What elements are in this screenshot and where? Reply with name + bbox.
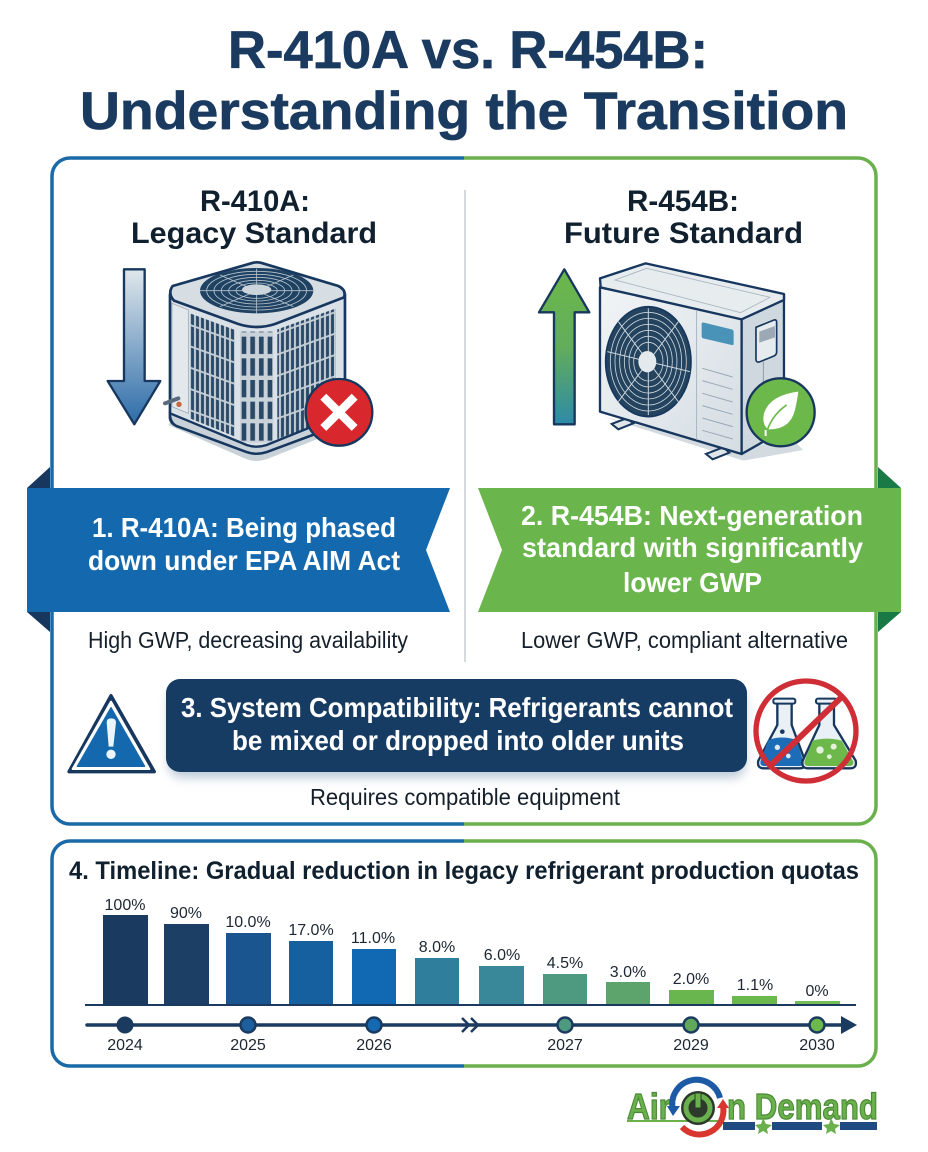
ribbon: R-454B: 2. R-454B: Next-generation [521,500,863,531]
bar chart: production quotas [85,897,856,1006]
heading: R-410A: Legacy Standard [131,217,377,250]
bar chart: production quotas: 6.0% [484,947,520,964]
timeline axis: 2029 [673,1037,709,1054]
logo: Air On Demand [627,1080,878,1134]
bar chart: production quotas: 1.1% [737,977,773,994]
heading: R-454B: Future Standard [564,217,803,250]
ribbon: R-410A: down under EPA AIM Act [88,545,400,576]
icon: no-mixing flasks [756,681,856,781]
bar chart: production quotas: 0% [805,983,829,1000]
heading: R-410A [131,185,377,250]
heading: timeline: 4. Timeline: Gradual reduction in legacy refrigerant production quotas [69,857,859,885]
bar chart: production quotas: 100% [105,897,145,914]
logo: Air On Demand: n Demand [727,1086,878,1127]
bar chart: production quotas: 17.0% [288,922,334,939]
icon: modern outdoor unit with leaf [600,263,815,461]
timeline axis: 2025 [230,1037,266,1054]
bar chart: production quotas: 10.0% [225,914,271,931]
timeline axis [87,1016,857,1054]
icon: legacy condenser unit with red X [165,262,372,461]
bar chart: production quotas: 8.0% [419,939,455,956]
panel: timeline [52,841,876,1066]
text: equipment note: Requires compatible equipment [310,784,621,810]
ribbon: R-454B: lower GWP [623,567,762,598]
title: R-410A vs. R-454B: [228,21,708,80]
ribbon: R-454B: standard with significantly [522,532,863,563]
text: R-454B note: Lower GWP, compliant alternative [521,627,848,653]
logo: Air On Demand: Air [627,1086,671,1127]
bar chart: production quotas: 11.0% [351,930,395,947]
timeline axis: 2027 [547,1037,583,1054]
icon: warning triangle [69,696,154,772]
panel: comparison [27,158,901,824]
icon: up arrow [539,269,589,424]
ribbon: R-410A [27,467,450,632]
bar chart: production quotas: 4.5% [547,955,583,972]
bar chart: production quotas: 90% [170,905,202,922]
callout: system compatibility [166,679,747,778]
icon: down arrow [108,269,160,424]
bar chart: production quotas: 3.0% [610,964,646,981]
heading: R-454B: R-454B: [627,185,739,218]
ribbon: R-410A: 1. R-410A: Being phased [92,512,396,543]
text: R-410A note: High GWP, decreasing availability [88,627,408,653]
heading: R-454B [564,185,803,250]
title: Understanding the Transition [80,82,848,141]
callout: system compatibility: be mixed or dropped into older units [232,725,684,756]
callout: system compatibility: 3. System Compatibility: Refrigerants cannot [181,692,733,723]
timeline axis: 2024 [107,1037,143,1054]
timeline axis: 2026 [356,1037,392,1054]
heading: R-410A: R-410A: [200,185,310,218]
timeline axis: 2030 [799,1037,835,1054]
bar chart: production quotas: 2.0% [673,971,709,988]
title [80,21,848,141]
ribbon: R-454B [478,467,901,632]
